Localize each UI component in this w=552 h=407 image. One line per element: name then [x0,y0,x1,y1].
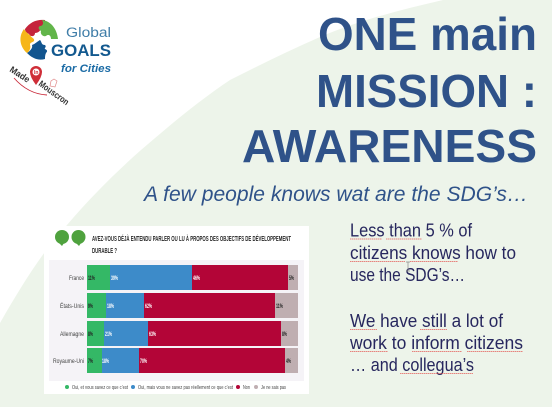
chart legend: Non [243,385,250,391]
stacked bar chart [49,260,304,381]
row: Royaume-Uni: 4% [286,359,291,365]
row: Royaume-Uni: 70% [140,359,147,365]
logo: Made in Mouscron: In [34,70,38,76]
text block: citizens awareness: Less than 5 % of [350,220,473,240]
text block: citizens awareness: work to inform citizens [349,333,523,353]
row: Allemagne: 21% [105,332,112,338]
text block: citizens awareness: We have still a lot of [350,311,504,331]
title [242,8,537,172]
row: Allemagne: 63% [149,332,156,338]
title: AWARENESS [242,120,537,172]
row: États-Unis: 9% [88,304,93,310]
text block: citizens awareness: citizens knows how to [350,243,516,263]
row: États-Unis: 62% [145,304,152,310]
chart legend: Oui, mais vous ne savez pas réellement ce que c’est [138,385,233,391]
text: GOALS: GOALS [51,41,111,60]
row: Royaume-Uni [53,348,298,373]
chart legend: Oui, et vous savez ce que c’est [72,385,128,391]
icon: speech bubbles [55,230,86,246]
title: ONE main [318,8,537,60]
text block: citizens awareness: use the SDG’s… [350,265,465,285]
text: Global: Global [66,25,111,40]
text block: citizens awareness [349,220,523,375]
chart heading [92,234,291,255]
panel: survey chart [44,226,309,394]
row: États-Unis [60,293,298,318]
row: Royaume-Uni: 7% [88,359,93,365]
row: France: 39% [111,276,118,282]
row: France: 5% [289,276,294,282]
chart heading: DURABLE ? [92,248,117,255]
row: Royaume-Uni: Royaume-Uni [53,358,84,365]
logo: Made in Mouscron: Made [8,64,32,85]
row: Allemagne [60,321,298,346]
logo: Made in Mouscron: Mouscron [37,79,71,107]
row: États-Unis: États-Unis [60,301,85,310]
icon: puzzle ring [20,20,58,60]
row: France: 46% [193,276,200,282]
row: Allemagne: 8% [282,332,287,338]
chart heading: AVEZ-VOUS DÉJÀ ENTENDU PARLER OU LU À PROPOS DES OBJECTIFS DE DÉVELOPPEMENT [92,234,291,243]
text: for Cities: for Cities [61,63,111,75]
icon: text cursor [406,262,410,271]
chart legend [65,385,286,391]
logo: Made in Mouscron [8,64,71,107]
logo: Global Goals for Cities [8,20,111,107]
title: MISSION : [316,65,537,117]
subtitle: A few people knows wat are the SDG’s… [142,183,528,206]
row: États-Unis: 11% [276,304,283,310]
row: France: 11% [88,276,95,282]
row: France: France [69,275,84,282]
row: Allemagne: Allemagne [60,331,84,338]
text block: citizens awareness: … and collegua’s [350,355,474,375]
row: Royaume-Uni: 18% [102,359,109,365]
row: France [69,265,298,290]
spellcheck underlines [350,239,523,374]
chart legend: Je ne sais pas [261,385,286,391]
row: États-Unis: 18% [107,304,114,310]
row: Allemagne: 8% [88,332,93,338]
